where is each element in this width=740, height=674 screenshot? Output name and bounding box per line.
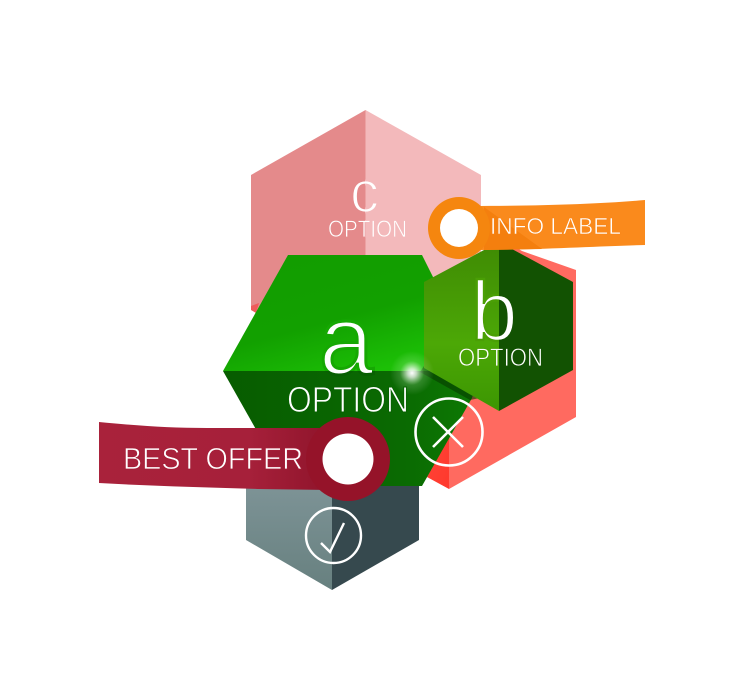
icon: cross in circle xyxy=(416,398,482,466)
icon: light glare xyxy=(390,351,434,395)
text: info label: INFO LABEL xyxy=(490,213,621,239)
text: option a label: OPTION xyxy=(287,379,409,420)
panel: option b hexagon xyxy=(424,242,573,411)
text: option a letter: a xyxy=(319,285,374,395)
text: best offer: BEST OFFER xyxy=(123,441,303,476)
text: option c label: OPTION xyxy=(328,216,407,243)
label: info label ribbon xyxy=(428,197,645,259)
text: option b label: OPTION xyxy=(458,344,543,372)
label: best offer ribbon xyxy=(99,417,390,501)
panel: option a hexagon xyxy=(223,255,480,486)
panel: option b red backing xyxy=(427,244,576,489)
panel: option c hexagon xyxy=(251,110,481,330)
text: option b letter: b xyxy=(471,264,518,358)
icon: check in circle xyxy=(306,508,361,563)
text: option c letter: c xyxy=(350,160,379,225)
panel: gray check hexagon xyxy=(246,486,419,590)
